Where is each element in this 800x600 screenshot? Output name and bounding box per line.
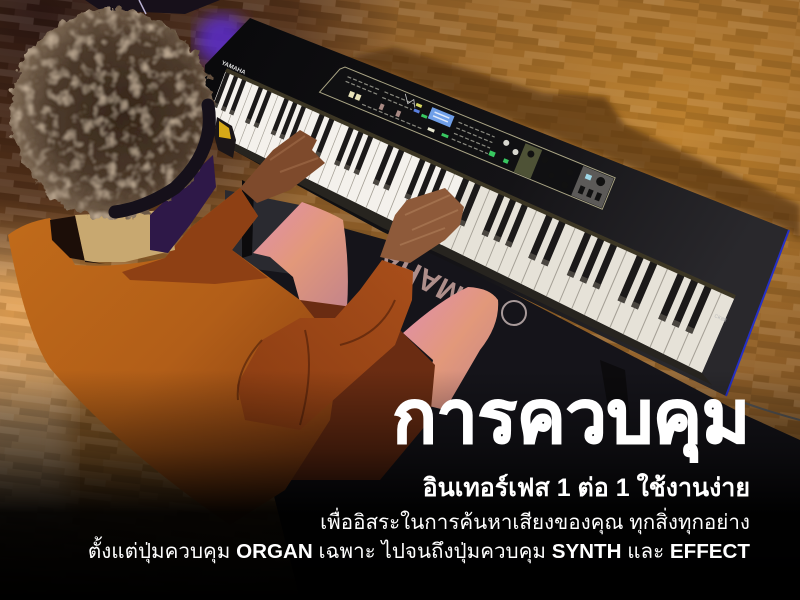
shoulder yoke — [122, 188, 268, 284]
neck — [75, 210, 175, 262]
rug lettering: YAMAHA — [373, 241, 503, 329]
shirt torso — [8, 188, 340, 525]
sleeve fold lines — [238, 300, 395, 425]
keyboard body — [204, 18, 789, 396]
purple stage glow — [196, 14, 248, 66]
face in shadow — [150, 155, 216, 253]
collar — [50, 216, 105, 264]
glasses — [214, 117, 236, 158]
hand right — [380, 188, 464, 263]
dark rug under keyboard — [225, 190, 800, 600]
hand left — [240, 130, 325, 203]
rug logo — [502, 301, 526, 325]
key back felt line — [226, 70, 735, 297]
title: การควบคุม — [392, 377, 750, 458]
keys — [214, 70, 735, 373]
keyboard stand — [242, 180, 630, 420]
sleeve arm — [237, 260, 413, 430]
bottom fade — [0, 370, 800, 600]
shorts — [260, 300, 435, 480]
control panel — [319, 62, 615, 209]
body line one: เพื่ออิสระในการค้นหาเสียงของคุณ ทุกสิ่งทุกอย่าง — [320, 511, 750, 534]
keyboard shadow on floor — [350, 47, 800, 240]
headband — [115, 105, 209, 212]
model label: CK88 — [713, 313, 727, 324]
stage equipment at top edge — [85, 0, 220, 14]
leg one — [253, 202, 348, 307]
cable — [745, 403, 800, 420]
brand label: YAMAHA — [220, 60, 247, 77]
hair — [10, 9, 214, 217]
subtitle: อินเทอร์เฟส 1 ต่อ 1 ใช้งานง่าย — [423, 474, 750, 502]
body line two: ตั้งแต่ปุ่มควบคุม ORGAN เฉพาะ ไปจนถึงปุ่มควบคุม SYNTH และ EFFECT — [88, 540, 750, 563]
leg two — [403, 287, 498, 410]
